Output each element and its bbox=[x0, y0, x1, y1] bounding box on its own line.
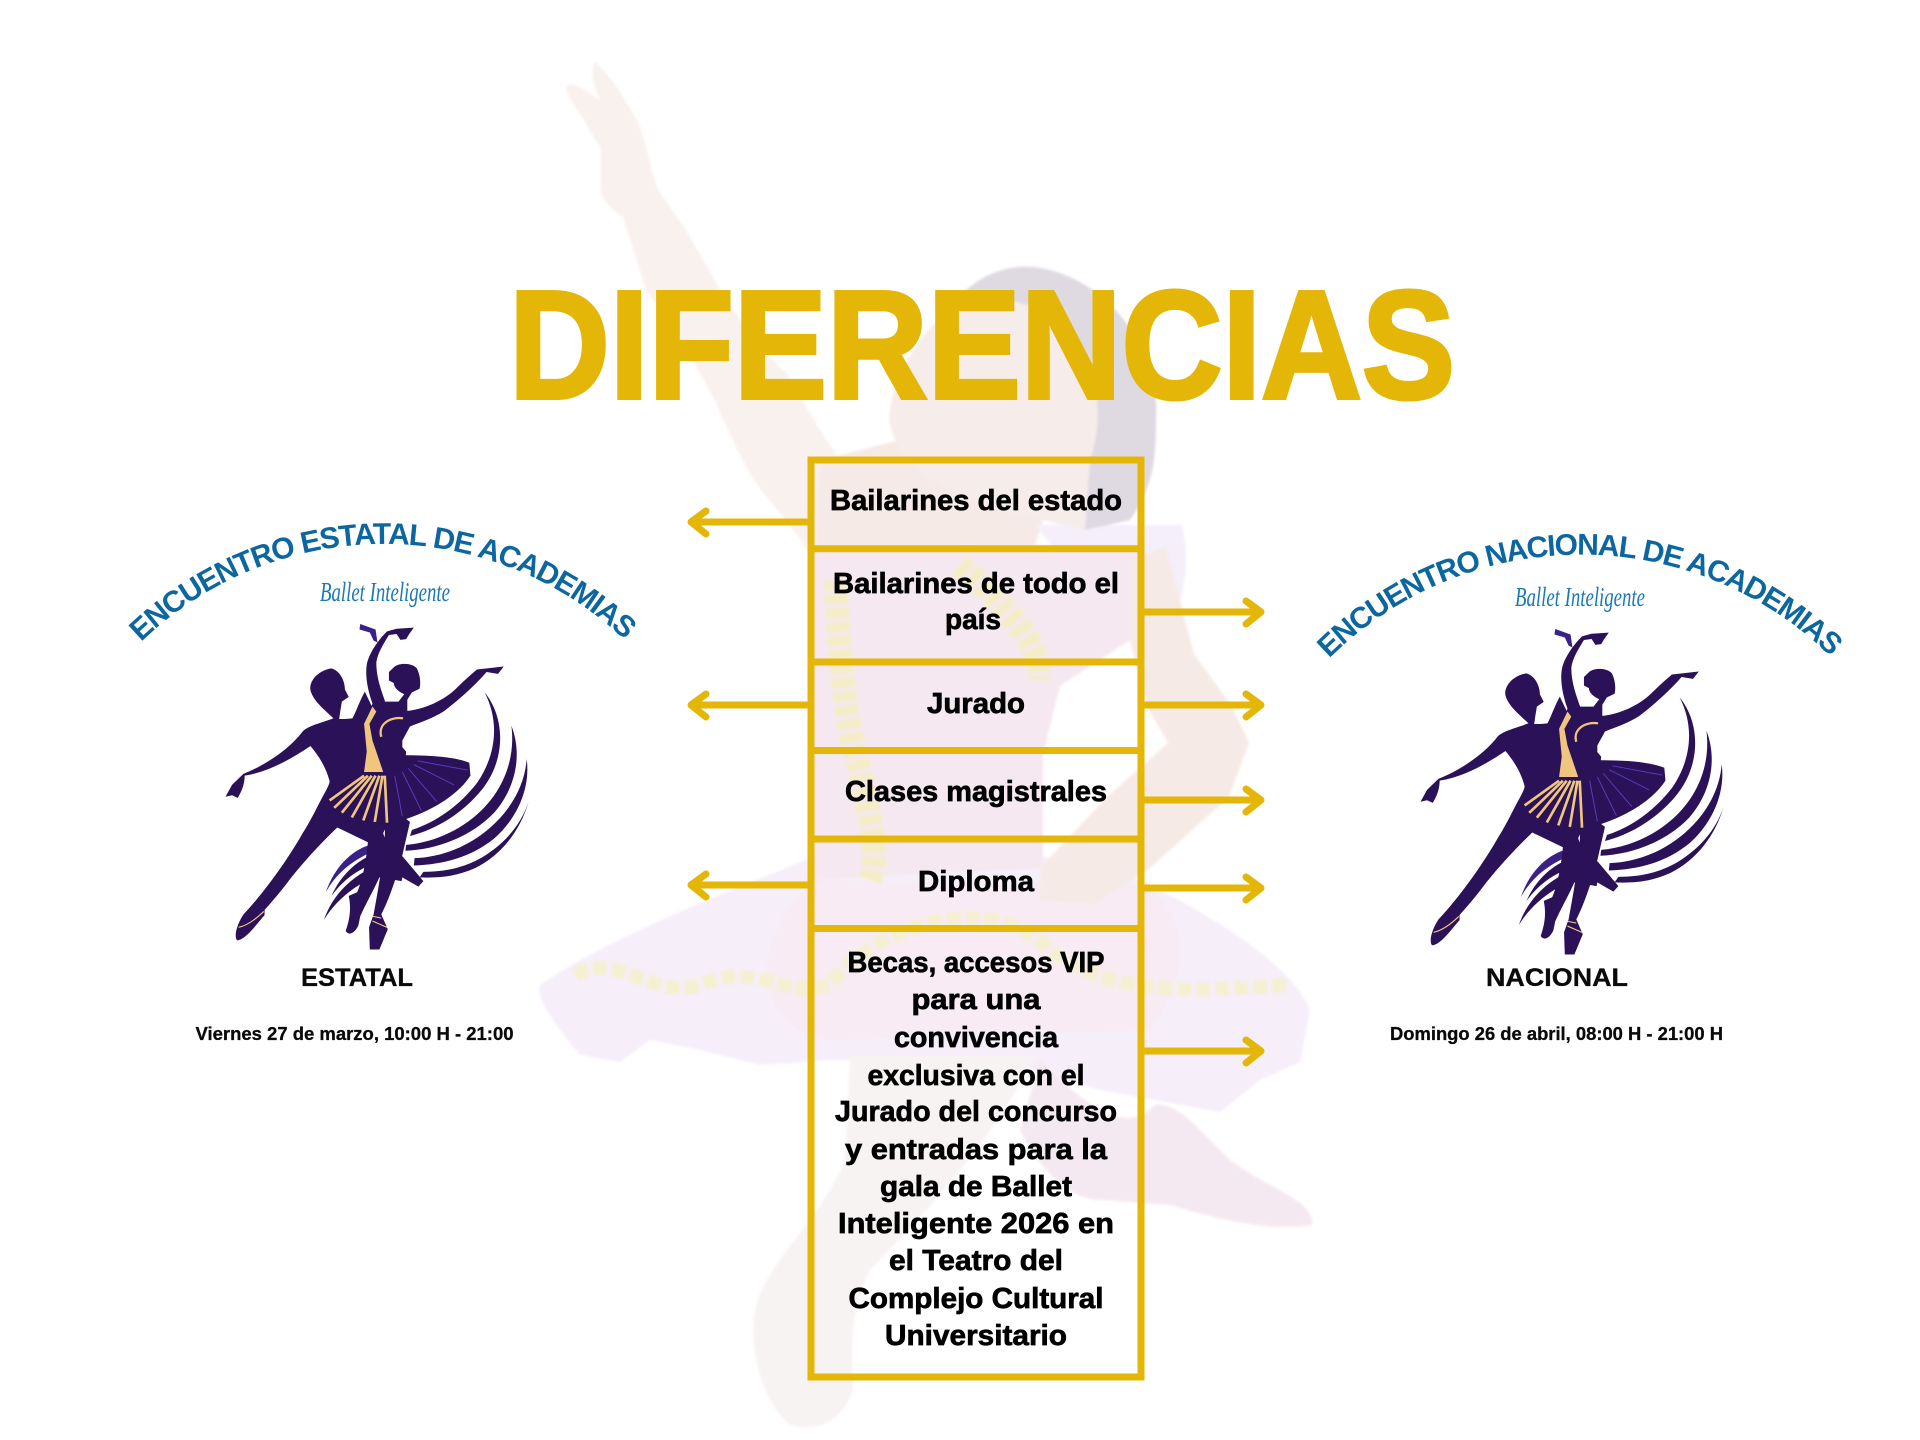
arrow right: Clases magistrales bbox=[1145, 789, 1261, 812]
row: Becas: para una bbox=[912, 984, 1041, 1016]
row: Becas: Becas, accesos VIP bbox=[848, 947, 1104, 979]
arrow right: Jurado bbox=[1145, 694, 1261, 717]
logo script: Ballet Inteligente: Ballet Inteligente bbox=[1515, 582, 1645, 612]
ballerina face bbox=[889, 301, 1098, 530]
arrow right: Diploma bbox=[1145, 877, 1261, 900]
logo dancers: estatal bbox=[226, 624, 529, 950]
row: Clases magistrales: Clases magistrales bbox=[845, 776, 1107, 808]
row: Becas: y entradas para la bbox=[845, 1134, 1108, 1166]
panel: nacional bbox=[1316, 534, 1842, 1044]
table frame and row dividers bbox=[811, 460, 1141, 1377]
tutu upper pink shading bbox=[767, 880, 1180, 1040]
row: Becas: exclusiva con el bbox=[868, 1060, 1084, 1092]
title: DIFERENCIAS bbox=[509, 259, 1455, 431]
arrows bbox=[691, 511, 1261, 1063]
logo title arc: nacional: ENCUENTRO NACIONAL DE ACADEMIAS bbox=[1316, 534, 1842, 658]
logo dancers: nacional bbox=[1421, 629, 1724, 955]
arrow left: Jurado bbox=[691, 694, 807, 717]
logo script: Ballet Inteligente: Ballet Inteligente bbox=[320, 577, 450, 607]
arrow left: Diploma bbox=[691, 874, 807, 897]
row: Becas: gala de Ballet bbox=[880, 1171, 1072, 1203]
row: Becas: Universitario bbox=[885, 1320, 1067, 1352]
ballerina right arm bbox=[1040, 547, 1249, 904]
row: Bailarines de todo el país: Bailarines de todo el bbox=[833, 568, 1119, 600]
ballerina bodice bbox=[814, 545, 1140, 880]
arrow left: Bailarines del estado bbox=[691, 511, 807, 534]
ballerina raised arm bbox=[566, 62, 840, 551]
ballerina sleeve bbox=[1035, 525, 1186, 640]
background ballerina photo bbox=[539, 62, 1312, 1427]
row: Diploma: Diploma bbox=[918, 866, 1035, 898]
logo title arc: estatal: ENCUENTRO ESTATAL DE ACADEMIAS bbox=[128, 523, 636, 641]
row: Becas: Complejo Cultural bbox=[848, 1283, 1104, 1315]
arrow right: Becas bbox=[1145, 1040, 1261, 1063]
row: Bailarines del estado: Bailarines del estado bbox=[830, 485, 1122, 517]
panel: estatal bbox=[128, 523, 636, 1044]
arrow right: Bailarines de todo el país bbox=[1145, 601, 1261, 624]
ballerina right leg and foot bbox=[1020, 1060, 1312, 1227]
row: Becas: el Teatro del bbox=[889, 1245, 1063, 1277]
ballerina hair bbox=[945, 267, 1156, 530]
date: nacional: Domingo 26 de abril, 08:00 H - 21:00 H bbox=[1390, 1024, 1723, 1044]
date: estatal: Viernes 27 de marzo, 10:00 H - 21:00 bbox=[196, 1024, 514, 1044]
row: Becas: Jurado del concurso bbox=[835, 1096, 1117, 1128]
comparison table bbox=[811, 460, 1141, 1377]
ballerina neck and chest bbox=[815, 440, 1060, 548]
label: ESTATAL: ESTATAL bbox=[301, 964, 413, 992]
ballerina tutu skirt bbox=[539, 846, 1310, 1112]
tutu embroidery bbox=[575, 918, 1285, 989]
row: Bailarines de todo el país bbox=[833, 568, 1119, 636]
bodice embroidery bbox=[835, 565, 1040, 880]
row: Becas bbox=[835, 947, 1117, 1352]
row: Jurado: Jurado bbox=[927, 688, 1025, 720]
row: Becas: convivencia bbox=[894, 1022, 1059, 1054]
row: Becas: Inteligente 2026 en bbox=[838, 1208, 1114, 1240]
label: NACIONAL: NACIONAL bbox=[1486, 964, 1628, 992]
ballerina left leg bbox=[753, 1055, 1035, 1427]
row: Bailarines de todo el país: país bbox=[945, 604, 1001, 636]
